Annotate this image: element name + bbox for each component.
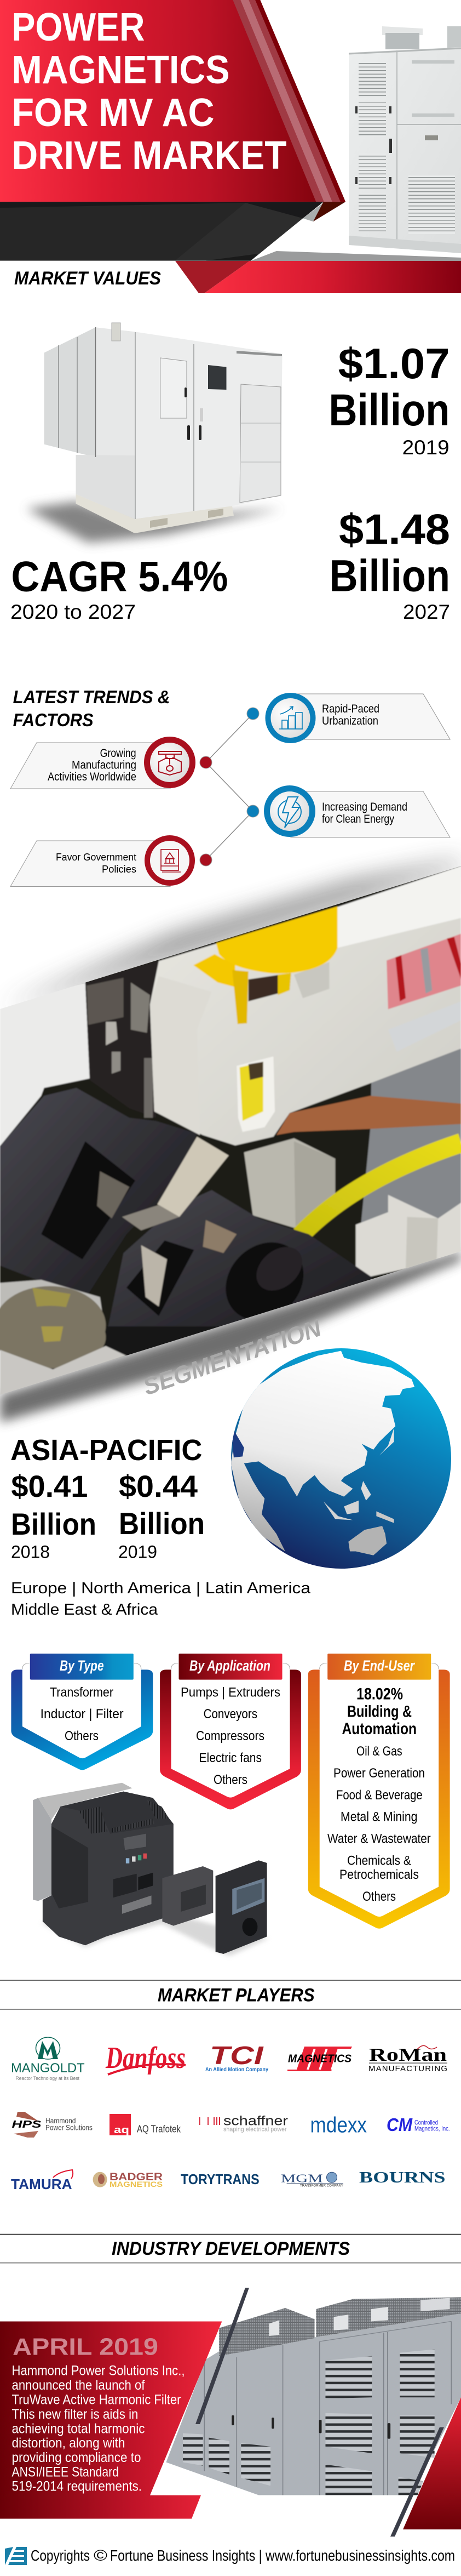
- icon: lightning bolt: [264, 785, 315, 837]
- yellow dome: [193, 907, 337, 1024]
- stat: 2019 market value: [329, 339, 450, 459]
- title: POWER: [12, 5, 145, 49]
- logo: Badger Magnetics: BADGER: [110, 2172, 163, 2183]
- stat: 2019 market value: $1.07: [338, 339, 450, 387]
- panel: by end-user: Chemicals &: [347, 1854, 411, 1868]
- logo: Hammond Power Solutions: Hammond: [45, 2116, 76, 2125]
- factor: rapid-paced urbanization: Urbanization: [322, 715, 378, 727]
- panel seams: [204, 2321, 451, 2495]
- red panel: development text block: APRIL 2019: [13, 2334, 158, 2361]
- heading: industry developments: INDUSTRY DEVELOPMENTS: [112, 2238, 350, 2259]
- dark slanted accent lines: [195, 2288, 444, 2537]
- panel: by application: Others: [214, 1773, 247, 1787]
- metal terminal: [85, 960, 159, 1118]
- red panel: right corner: [403, 2397, 461, 2529]
- logo: TCI: TCI: [210, 2041, 264, 2070]
- screw: [0, 1279, 103, 1311]
- logo: Controlled Magnetics: Magnetics, Inc.: [414, 2124, 450, 2132]
- text: other regions: Middle East & Africa: [11, 1601, 158, 1618]
- red panel: development text block: 519-2014 requirements.: [12, 2478, 142, 2494]
- logo: Controlled Magnetics: [387, 2115, 450, 2135]
- panel: by end-user: Automation: [342, 1720, 417, 1738]
- panel: by type: Others: [65, 1729, 99, 1743]
- stat: 2018: 2018: [11, 1542, 50, 1562]
- stat: 2027 market value: 2027: [403, 601, 450, 623]
- logo: MGM: [281, 2172, 343, 2188]
- red panel: development text block: announced the launch of: [12, 2378, 145, 2393]
- stat: 2027 market value: [330, 505, 450, 623]
- stat: 2018: Billion: [11, 1507, 96, 1541]
- panel: industry development photo: [166, 2297, 461, 2495]
- copper wire: [276, 1096, 461, 1135]
- logo: Hammond Power Solutions: Power Solutions: [45, 2123, 93, 2132]
- heading: market players: MARKET PLAYERS: [158, 1985, 315, 2006]
- heading: latest trends and factors: [13, 687, 170, 730]
- logo: TCI: An Allied Motion Company: [205, 2067, 268, 2073]
- panel: by end-user: Metal & Mining: [341, 1810, 417, 1825]
- stat: 2018: [11, 1469, 96, 1562]
- logo: Hammond Power Solutions: HPS: [12, 2119, 42, 2130]
- panel: by end-user: Oil & Gas: [356, 1744, 402, 1759]
- logo: Hammond Power Solutions: [12, 2112, 93, 2138]
- stat: CAGR: CAGR 5.4%: [11, 552, 228, 601]
- logo: Mangoldt: Reactor Technology at Its Best: [15, 2076, 79, 2081]
- title: MAGNETICS: [12, 48, 230, 92]
- text: other regions: Europe | North America | Latin America: [11, 1580, 311, 1597]
- pink resistor: [387, 934, 461, 1009]
- logo: Mangoldt: [11, 2037, 85, 2081]
- factor: clean energy: [264, 785, 450, 837]
- logo: Magnetics: MAGNETICS: [288, 2053, 352, 2065]
- title: DRIVE MARKET: [12, 134, 287, 178]
- stat: 2019: [118, 1469, 205, 1562]
- panel: by application: Conveyors: [204, 1707, 257, 1722]
- red panel: development text block: [0, 2322, 222, 2519]
- grey plastic block: [244, 1138, 335, 1228]
- icon: 3d printer: [144, 737, 195, 788]
- logo: AQ Trafotek: AQ Trafotek: [137, 2124, 181, 2135]
- panel: by end-user: Others: [362, 1889, 396, 1904]
- logo: Controlled Magnetics: CM: [387, 2115, 413, 2135]
- icon: city skyline: [265, 693, 315, 743]
- stat: 2019 market value: 2019: [402, 436, 450, 459]
- panel: by end-user: Water & Wastewater: [327, 1832, 431, 1846]
- black grommet 2: [106, 1190, 373, 1337]
- logo: RoMan: MANUFACTURING: [368, 2064, 447, 2073]
- white clip block: [356, 1195, 461, 1280]
- logo: Bourns: BOURNS: [359, 2169, 446, 2186]
- factor: rapid-paced urbanization: [265, 693, 450, 743]
- logo: Schaffner: schaffner: [223, 2113, 288, 2128]
- panel: market values cabinet photo: [26, 323, 283, 543]
- photo shadows: [0, 860, 461, 1422]
- factor: growing manufacturing: Activities Worldwide: [48, 771, 136, 783]
- panel: by end-user: By End-User: [344, 1657, 415, 1674]
- panel: by application: Compressors: [196, 1729, 264, 1743]
- stat: 2019: Billion: [119, 1506, 205, 1541]
- title: [12, 5, 287, 178]
- connector lines and dots: [200, 708, 259, 866]
- panel: by application: By Application: [189, 1657, 270, 1674]
- banner edge stripes: [0, 0, 345, 261]
- factor: government policies: [10, 835, 195, 887]
- red panel: development text block: This new filter is aids in: [12, 2407, 138, 2422]
- logo: Schaffner: [199, 2113, 288, 2133]
- factor: clean energy: for Clean Energy: [322, 813, 394, 825]
- cabinet body: [166, 2313, 461, 2495]
- stat: CAGR: [10, 552, 228, 623]
- heading: market values: MARKET VALUES: [14, 268, 161, 289]
- panel: by end-user: [308, 1654, 450, 1929]
- red banner shape: [0, 0, 345, 202]
- logo: Mangoldt: MANGOLDT: [11, 2061, 85, 2076]
- logo: mdexx: mdexx: [310, 2113, 367, 2138]
- factor: growing manufacturing: Manufacturing: [72, 759, 136, 772]
- red panel: development text block: achieving total harmonic: [12, 2421, 145, 2437]
- stat: 2018: $0.41: [11, 1469, 88, 1503]
- red panel: development text block: TruWave Active Harmonic Filter: [12, 2392, 181, 2407]
- stat: 2019: 2019: [118, 1542, 157, 1562]
- panel: Asia-Pacific stats: [10, 1434, 205, 1562]
- red panel: development text block: ANSI/IEEE Standard: [12, 2464, 119, 2480]
- louvers: [183, 2349, 435, 2495]
- logo: AQ Trafotek: [110, 2114, 181, 2135]
- panel: by type: [11, 1654, 153, 1770]
- logo: Danfoss: Danfoss: [105, 2041, 186, 2075]
- red bar under header: [175, 261, 461, 293]
- text: other regions: [11, 1580, 311, 1618]
- footer copyright: ©: [94, 2547, 107, 2564]
- stat: 2019: $0.44: [119, 1469, 198, 1503]
- logo: RoMan: [368, 2045, 447, 2073]
- yellow slot: [237, 1056, 275, 1132]
- logo: Controlled Magnetics: Controlled: [414, 2119, 438, 2127]
- panel: by end-user: Petrochemicals: [339, 1867, 419, 1882]
- title: FOR MV AC: [12, 91, 215, 135]
- factor: clean energy: Increasing Demand: [322, 801, 407, 813]
- panel: by end-user: Building &: [347, 1703, 412, 1721]
- black grommet 1: [0, 1088, 197, 1298]
- factor: government policies: Policies: [102, 863, 136, 875]
- icon: government document: [145, 835, 195, 886]
- logo: Badger Magnetics: [93, 2172, 163, 2189]
- yellow cable: [300, 1143, 461, 1236]
- heading: latest trends and factors: LATEST TRENDS &: [13, 687, 170, 707]
- panel: by application: Pumps | Extruders: [181, 1685, 280, 1700]
- footer copyright: Copyrights: [31, 2547, 90, 2564]
- panel: by end-user: Power Generation: [333, 1766, 425, 1781]
- logo: Badger Magnetics: MAGNETICS: [110, 2180, 163, 2189]
- panel: electrical component photo: [0, 860, 461, 1398]
- panel: by type: Inductor | Filter: [41, 1707, 124, 1722]
- red panel: development text block: providing compliance to: [12, 2450, 141, 2465]
- panel: by type: Transformer: [50, 1685, 113, 1700]
- panel: by application: [160, 1654, 301, 1809]
- white module body: [149, 917, 461, 1147]
- icon: Fortune Business Insights logo: [5, 2547, 27, 2565]
- door handles: [232, 2415, 390, 2439]
- heading: segmentation: SEGMENTATION: [140, 1314, 325, 1400]
- factor: growing manufacturing: Growing: [100, 747, 136, 760]
- logo: Magnetics: [287, 2047, 352, 2071]
- stat: CAGR: 2020 to 2027: [10, 601, 136, 623]
- panel: header banner: [0, 0, 461, 261]
- metal grey bg right: [360, 1048, 461, 1223]
- factor: growing manufacturing: [10, 737, 195, 789]
- factor: government policies: Favor Government: [56, 851, 136, 863]
- panel: by end-user: 18.02%: [356, 1685, 403, 1703]
- metal strips: [157, 1137, 229, 1217]
- heading: latest trends and factors: FACTORS: [13, 710, 94, 730]
- logo: Schaffner: shaping electrical power: [223, 2127, 287, 2133]
- icon: header cabinet photo: [251, 26, 461, 261]
- left white panel: [0, 983, 90, 1146]
- logo: Tamura: TAMURA: [11, 2176, 72, 2192]
- panel: Asia-Pacific stats: ASIA-PACIFIC: [10, 1434, 203, 1467]
- logo: MGM: MGM: [281, 2172, 323, 2185]
- logo: Torytrans: TORYTRANS: [181, 2171, 260, 2187]
- red panel: development text block: Hammond Power Solutions Inc.,: [12, 2363, 185, 2379]
- logo: TCI: [205, 2041, 268, 2073]
- top grills: [219, 2308, 315, 2356]
- logo: AQ Trafotek: aq: [114, 2124, 129, 2135]
- red panel: development text block: distortion, along with: [12, 2435, 125, 2450]
- panel: by end-user: Food & Beverage: [336, 1788, 423, 1803]
- panel: by type: By Type: [60, 1657, 104, 1674]
- logo: MGM: TRANSFORMER COMPANY: [300, 2185, 343, 2188]
- panel: by application: Electric fans: [199, 1751, 262, 1765]
- icon: globe: [231, 1348, 451, 1569]
- icon: AC drive product photo: [33, 1783, 268, 1956]
- factor: rapid-paced urbanization: Rapid-Paced: [322, 703, 379, 715]
- stat: 2027 market value: $1.48: [339, 505, 450, 554]
- logo: RoMan: RoMan: [369, 2045, 447, 2065]
